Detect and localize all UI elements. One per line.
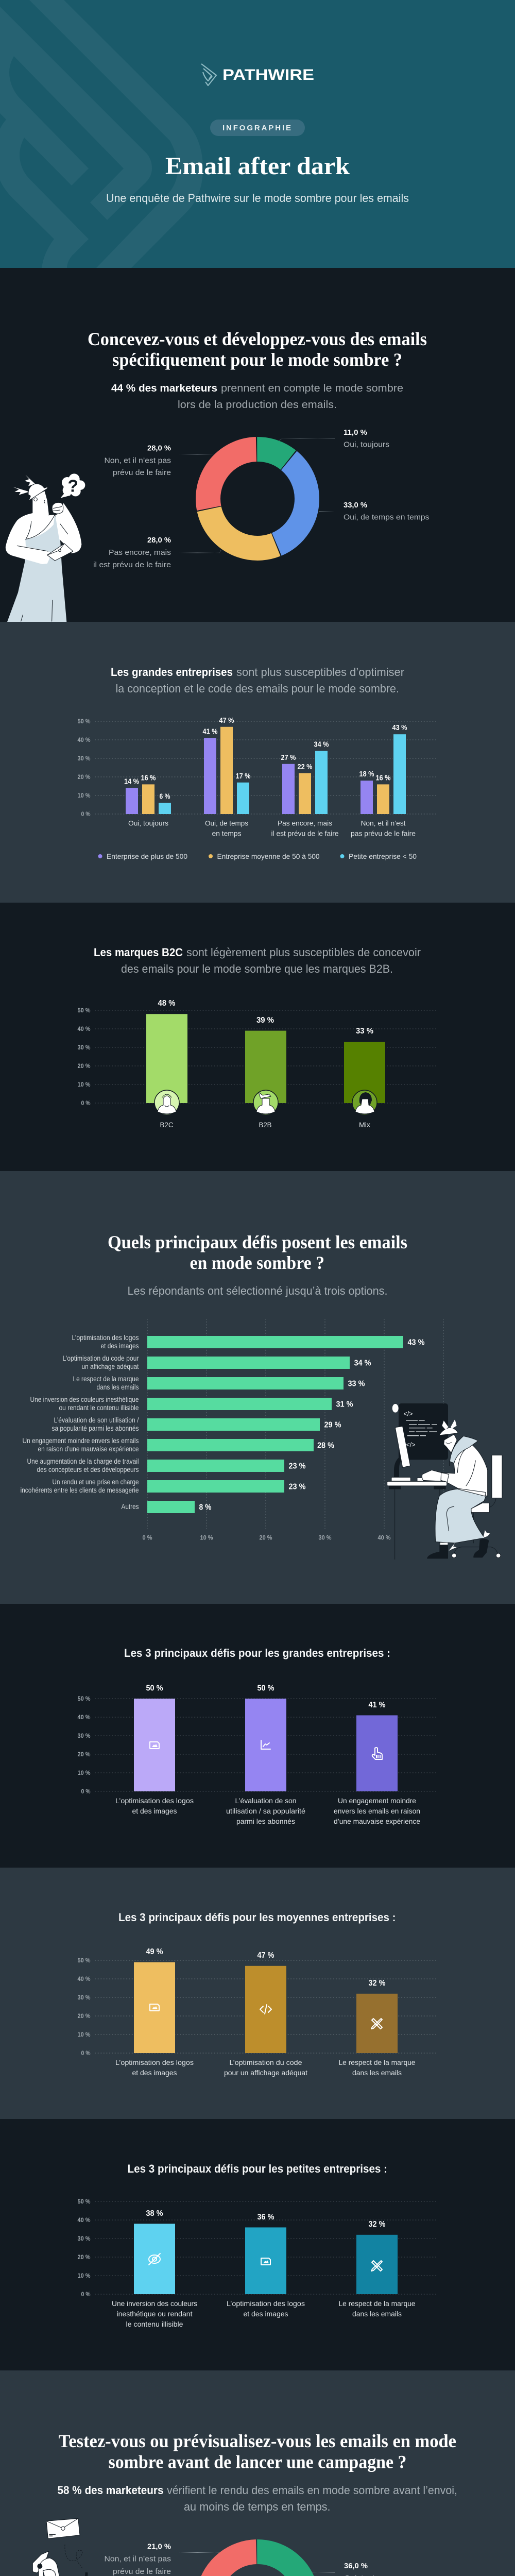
bar: logos et images: L’optimisation des logos (115, 1797, 194, 1805)
bar group: pas encore: 22 % (298, 762, 312, 771)
bar group: non: 43 % (392, 723, 407, 732)
bar group: oui, de temps en temps (203, 716, 250, 838)
panel: grandes entreprises défis (0, 1604, 515, 1868)
bar: engagement: d’une mauvaise expérience (334, 1817, 420, 1825)
horizontal bar chart (21, 1319, 443, 1541)
chart axis (77, 1007, 437, 1107)
thought bubble with question mark (60, 473, 85, 498)
chart axis: 50 % (77, 1957, 91, 1964)
bar group: pas encore: Pas encore, mais (278, 819, 332, 827)
bar: marque: Le respect de la marque (339, 2058, 416, 2066)
bar group: oui, toujours: Oui, toujours (128, 819, 168, 827)
bar group: non (351, 723, 416, 838)
chart axis: 40 % (77, 2216, 91, 2224)
illustration: thinking Hermes with envelope (6, 473, 85, 622)
panel: grandes entreprises (0, 622, 515, 903)
horizontal bar chart: 28 % (317, 1442, 334, 1450)
legend (98, 852, 417, 860)
chart axis (77, 1957, 437, 2057)
bar: évaluation: utilisation / sa popularité (226, 1807, 305, 1815)
bar: B2C (146, 999, 187, 1129)
chart axis: 40 % (77, 736, 91, 743)
bar: engagement: envers les emails en raison (334, 1807, 420, 1815)
bar: évaluation: 50 % (258, 1684, 274, 1693)
chart axis: 20 % (77, 1062, 91, 1070)
bar group: pas encore: il est prévu de le faire (271, 829, 339, 838)
horizontal bar chart: 43 % (408, 1338, 424, 1347)
chart axis: 10 % (77, 2031, 91, 2038)
bar: logos et images: 49 % (146, 1947, 163, 1956)
chair (452, 1455, 502, 1558)
bar group: oui, toujours: 16 % (141, 773, 156, 782)
donut labels: prévu de le faire (113, 469, 171, 477)
bar group: non: 16 % (376, 773, 390, 782)
horizontal bar chart: Le respect de la marque (73, 1375, 139, 1383)
bar: marque: Le respect de la marque (339, 2299, 416, 2308)
donut labels (93, 429, 430, 569)
donut labels: 11,0 % (344, 429, 367, 437)
panel: marques B2C (0, 903, 515, 1171)
heading: la conception et le code des emails pour le mode sombre. (115, 682, 399, 695)
heading: sombre avant de lancer une campagne ? (108, 2451, 407, 2472)
horizontal bar chart: 30 % (318, 1534, 332, 1541)
horizontal bar chart: 23 % (288, 1462, 306, 1470)
donut labels: 28,0 % (147, 536, 171, 545)
horizontal bar chart: Un engagement moindre envers les emails (23, 1437, 139, 1445)
heading: spécifiquement pour le mode sombre ? (112, 349, 402, 370)
horizontal bar chart: sa popularité parmi les abonnés (52, 1425, 139, 1432)
bar group: non: 18 % (359, 770, 374, 778)
bar group: pas encore: 34 % (314, 740, 329, 749)
horizontal bar chart: L’optimisation du code pour (63, 1354, 139, 1362)
bar: marque: 32 % (369, 1979, 385, 1988)
horizontal bar chart: un affichage adéquat (81, 1363, 139, 1370)
chart axis: 50 % (77, 1007, 91, 1014)
horizontal bar chart: Autres (122, 1503, 139, 1511)
intro text: au moins de temps en temps. (184, 2500, 331, 2513)
title: Email after dark (165, 152, 350, 180)
horizontal bar chart: 20 % (260, 1534, 272, 1541)
horizontal bar chart: 0 % (142, 1534, 152, 1541)
chart axis: 20 % (77, 2012, 91, 2020)
bar: code: L’optimisation du code (230, 2058, 302, 2066)
badge: infographie (210, 120, 305, 136)
donut labels: il est prévu de le faire (93, 561, 171, 569)
chart axis: 10 % (77, 1769, 91, 1776)
intro text: vérifient le rendu des emails en mode sombre avant l’envoi, (167, 2484, 457, 2497)
donut labels (93, 2543, 429, 2576)
bar: engagement: 41 % (369, 1701, 385, 1709)
bar: marque (339, 2220, 416, 2318)
chart axis: 40 % (77, 1975, 91, 1982)
illustration: Hermes coding at a desk: </> (406, 1441, 416, 1448)
chart axis (77, 718, 437, 818)
subtitle: Une enquête de Pathwire sur le mode sombre pour les emails (106, 192, 409, 205)
bar: B2C: 48 % (158, 999, 175, 1008)
chart axis: 0 % (81, 1788, 91, 1795)
horizontal bar chart: 23 % (288, 1483, 306, 1491)
bar: évaluation (226, 1684, 305, 1825)
heading: Les marques B2C (94, 946, 183, 959)
chart axis: 0 % (81, 2049, 91, 2057)
bar: engagement: Un engagement moindre (338, 1797, 416, 1805)
donut chart: 11 33 28 28 (208, 449, 307, 548)
chart axis: 30 % (77, 1044, 91, 1051)
donut labels: Oui, de temps en temps (344, 513, 430, 521)
horizontal bar chart: 33 % (348, 1380, 365, 1388)
bar: B2B (245, 1016, 286, 1129)
donut labels: Non, et il n’est pas (104, 456, 171, 465)
horizontal bar chart: 31 % (336, 1400, 353, 1409)
bar: B2C: B2C (160, 1121, 173, 1129)
heading (108, 1232, 407, 1273)
bar: inversion des couleurs: inesthétique ou rendant (116, 2310, 193, 2318)
intro text: lors de la production des emails. (178, 399, 337, 411)
bar: évaluation: parmi les abonnés (236, 1817, 295, 1825)
chart axis (77, 2198, 437, 2298)
legend: Entreprise moyenne de 50 à 500 (217, 852, 320, 860)
chart axis: 20 % (77, 773, 91, 781)
chart axis: 0 % (81, 810, 91, 818)
heading: Les grandes entreprises (111, 666, 233, 679)
bar: inversion des couleurs: Une inversion des couleurs (112, 2299, 197, 2308)
logo: Pathwire: PATHWIRE (222, 66, 314, 83)
icon: envelope (46, 2518, 80, 2538)
bar: logos et images (115, 1684, 194, 1815)
intro text: 44 % des marketeurs (111, 382, 217, 394)
badge: infographie: INFOGRAPHIE (222, 124, 291, 132)
chart axis: 10 % (77, 792, 91, 799)
donut labels: Oui, toujours (344, 441, 389, 449)
donut labels: 33,0 % (344, 501, 367, 510)
horizontal bar chart: Un rendu et une prise en charge (53, 1478, 139, 1486)
bar group: non: Non, et il n’est (360, 819, 406, 827)
heading: en mode sombre ? (190, 1252, 324, 1273)
bar: code: 47 % (258, 1951, 274, 1960)
heading (111, 666, 404, 695)
bar group: oui, de temps en temps: 17 % (236, 772, 250, 781)
chart axis: 30 % (77, 2235, 91, 2242)
bar: logos et images: L’optimisation des logos (227, 2299, 305, 2308)
heading: Quels principaux défis posent les emails (108, 1232, 407, 1252)
horizontal bar chart: et des images (101, 1342, 139, 1350)
bar: marque (339, 1979, 416, 2077)
bar: logos et images: 50 % (146, 1684, 163, 1693)
horizontal bar chart: 34 % (354, 1359, 371, 1367)
chart axis: 0 % (81, 2291, 91, 2298)
panel: moyennes entreprises défis (0, 1868, 515, 2119)
chart axis: 20 % (77, 2253, 91, 2261)
intro text: Les répondants ont sélectionné jusqu’à trois options. (128, 1284, 387, 1297)
bar group: oui, toujours (124, 773, 171, 827)
bar: inversion des couleurs: 38 % (146, 2209, 163, 2218)
donut labels: prévu de le faire (113, 2568, 171, 2576)
bar group: pas encore: 27 % (281, 753, 296, 762)
bar: Mix (344, 1027, 385, 1129)
donut labels: 21,0 % (147, 2543, 171, 2551)
bar: logos et images: L’optimisation des logos (115, 2058, 194, 2066)
horizontal bar chart: 29 % (324, 1421, 341, 1429)
heading: Testez-vous ou prévisualisez-vous les emails en mode (59, 2431, 456, 2451)
chart axis (77, 1695, 437, 1795)
bar: engagement (334, 1701, 420, 1825)
chart axis: 50 % (77, 2198, 91, 2205)
bar: Mix: 33 % (356, 1027, 373, 1036)
heading: des emails pour le mode sombre que les marques B2B. (121, 962, 393, 975)
bar: code (224, 1951, 307, 2077)
logo: Pathwire (201, 64, 314, 86)
chart axis: 20 % (77, 1751, 91, 1758)
horizontal bar chart: en raison d’une mauvaise expérience (38, 1445, 139, 1453)
heading: Les 3 principaux défis pour les petites entreprises : (128, 2162, 387, 2175)
horizontal bar chart: des concepteurs et des développeurs (37, 1466, 139, 1473)
heading: sont plus susceptibles d’optimiser (236, 666, 404, 679)
chart axis: 40 % (77, 1714, 91, 1721)
bar group: pas encore (271, 740, 339, 838)
horizontal bar chart: Une augmentation de la charge de travail (27, 1458, 139, 1465)
bar: logos et images: et des images (132, 2069, 177, 2077)
bar: B2B: 39 % (256, 1016, 274, 1025)
chart axis: 30 % (77, 755, 91, 762)
heading: Les 3 principaux défis pour les moyennes entreprises : (118, 1911, 396, 1924)
bar: B2B: B2B (259, 1121, 272, 1129)
panel: tests avant campagne (0, 2370, 515, 2576)
panel: petites entreprises défis (0, 2119, 515, 2370)
horizontal bar chart: 10 % (200, 1534, 213, 1541)
bar group: oui, de temps en temps: en temps (212, 829, 241, 838)
bar group: oui, de temps en temps: Oui, de temps (205, 819, 248, 827)
bar: évaluation: L’évaluation de son (235, 1797, 297, 1805)
horizontal bar chart: incohérents entre les clients de messagerie (21, 1486, 139, 1494)
chart axis: 10 % (77, 1081, 91, 1088)
chart axis: 30 % (77, 1994, 91, 2001)
heading: Les 3 principaux défis pour les grandes entreprises : (124, 1647, 390, 1659)
heading (88, 329, 427, 370)
legend: Enterprise de plus de 500 (107, 852, 187, 860)
panel: principaux défis (0, 1171, 515, 1604)
chart axis: 0 % (81, 1099, 91, 1107)
illustration: Hermes coding at a desk (387, 1403, 502, 1560)
panel: conception pour le mode sombre (0, 268, 515, 622)
donut chart: 36 23 20 21 (208, 2552, 307, 2576)
bar: marque: dans les emails (352, 2069, 402, 2077)
bar: logos et images (115, 1947, 194, 2077)
donut labels: Pas encore, mais (109, 549, 171, 557)
heading: sont légèrement plus susceptibles de concevoir (186, 946, 421, 959)
bar: logos et images: et des images (132, 1807, 177, 1815)
heading: Concevez-vous et développez-vous des emails (88, 329, 427, 349)
chart axis: 10 % (77, 2272, 91, 2279)
horizontal bar chart: L’évaluation de son utilisation / (54, 1416, 139, 1424)
bar: marque: 32 % (369, 2220, 385, 2229)
bar group: oui, de temps en temps: 47 % (219, 716, 234, 725)
bar: Mix: Mix (359, 1121, 370, 1129)
intro text (111, 382, 403, 411)
donut labels: 36,0 % (344, 2562, 368, 2570)
horizontal bar chart: dans les emails (97, 1383, 139, 1391)
intro text (58, 2484, 457, 2513)
legend: Petite entreprise < 50 (349, 852, 417, 860)
illustration: Athena with phone and envelope (18, 2518, 92, 2576)
illustration: Hermes coding at a desk: </> (403, 1410, 413, 1417)
horizontal bar chart: L’optimisation des logos (72, 1334, 139, 1342)
heading (59, 2431, 456, 2472)
boots (427, 1530, 490, 1558)
horizontal bar chart: Une inversion des couleurs inesthétique (30, 1396, 139, 1403)
bar: inversion des couleurs (112, 2209, 197, 2328)
heading (94, 946, 421, 975)
bar group: oui, toujours: 14 % (124, 777, 139, 786)
chart axis: 30 % (77, 1732, 91, 1739)
donut labels: 28,0 % (147, 444, 171, 452)
horizontal bar chart: 40 % (378, 1534, 391, 1541)
chart axis: 40 % (77, 1025, 91, 1032)
bar: inversion des couleurs: le contenu illisible (126, 2320, 183, 2328)
bar: marque: dans les emails (352, 2310, 402, 2318)
bar: code: pour un affichage adéquat (224, 2069, 307, 2077)
panel: header (0, 0, 515, 268)
bar group: oui, toujours: 6 % (160, 792, 170, 801)
horizontal bar chart: ou rendant le contenu illisible (59, 1404, 139, 1412)
chart axis: 50 % (77, 1695, 91, 1702)
bar: logos et images: 36 % (258, 2213, 274, 2222)
chart axis: 50 % (77, 718, 91, 725)
bar: logos et images: et des images (243, 2310, 288, 2318)
horizontal bar chart: 8 % (199, 1503, 211, 1512)
intro text: 58 % des marketeurs (58, 2484, 164, 2497)
bar group: oui, de temps en temps: 41 % (203, 727, 217, 736)
bar: logos et images (227, 2213, 305, 2318)
intro text: prennent en compte le mode sombre (221, 382, 403, 394)
thought bubble with question mark: ? (67, 477, 78, 496)
bar group: non: pas prévu de le faire (351, 829, 416, 838)
donut labels: Non, et il n’est pas (104, 2555, 171, 2564)
